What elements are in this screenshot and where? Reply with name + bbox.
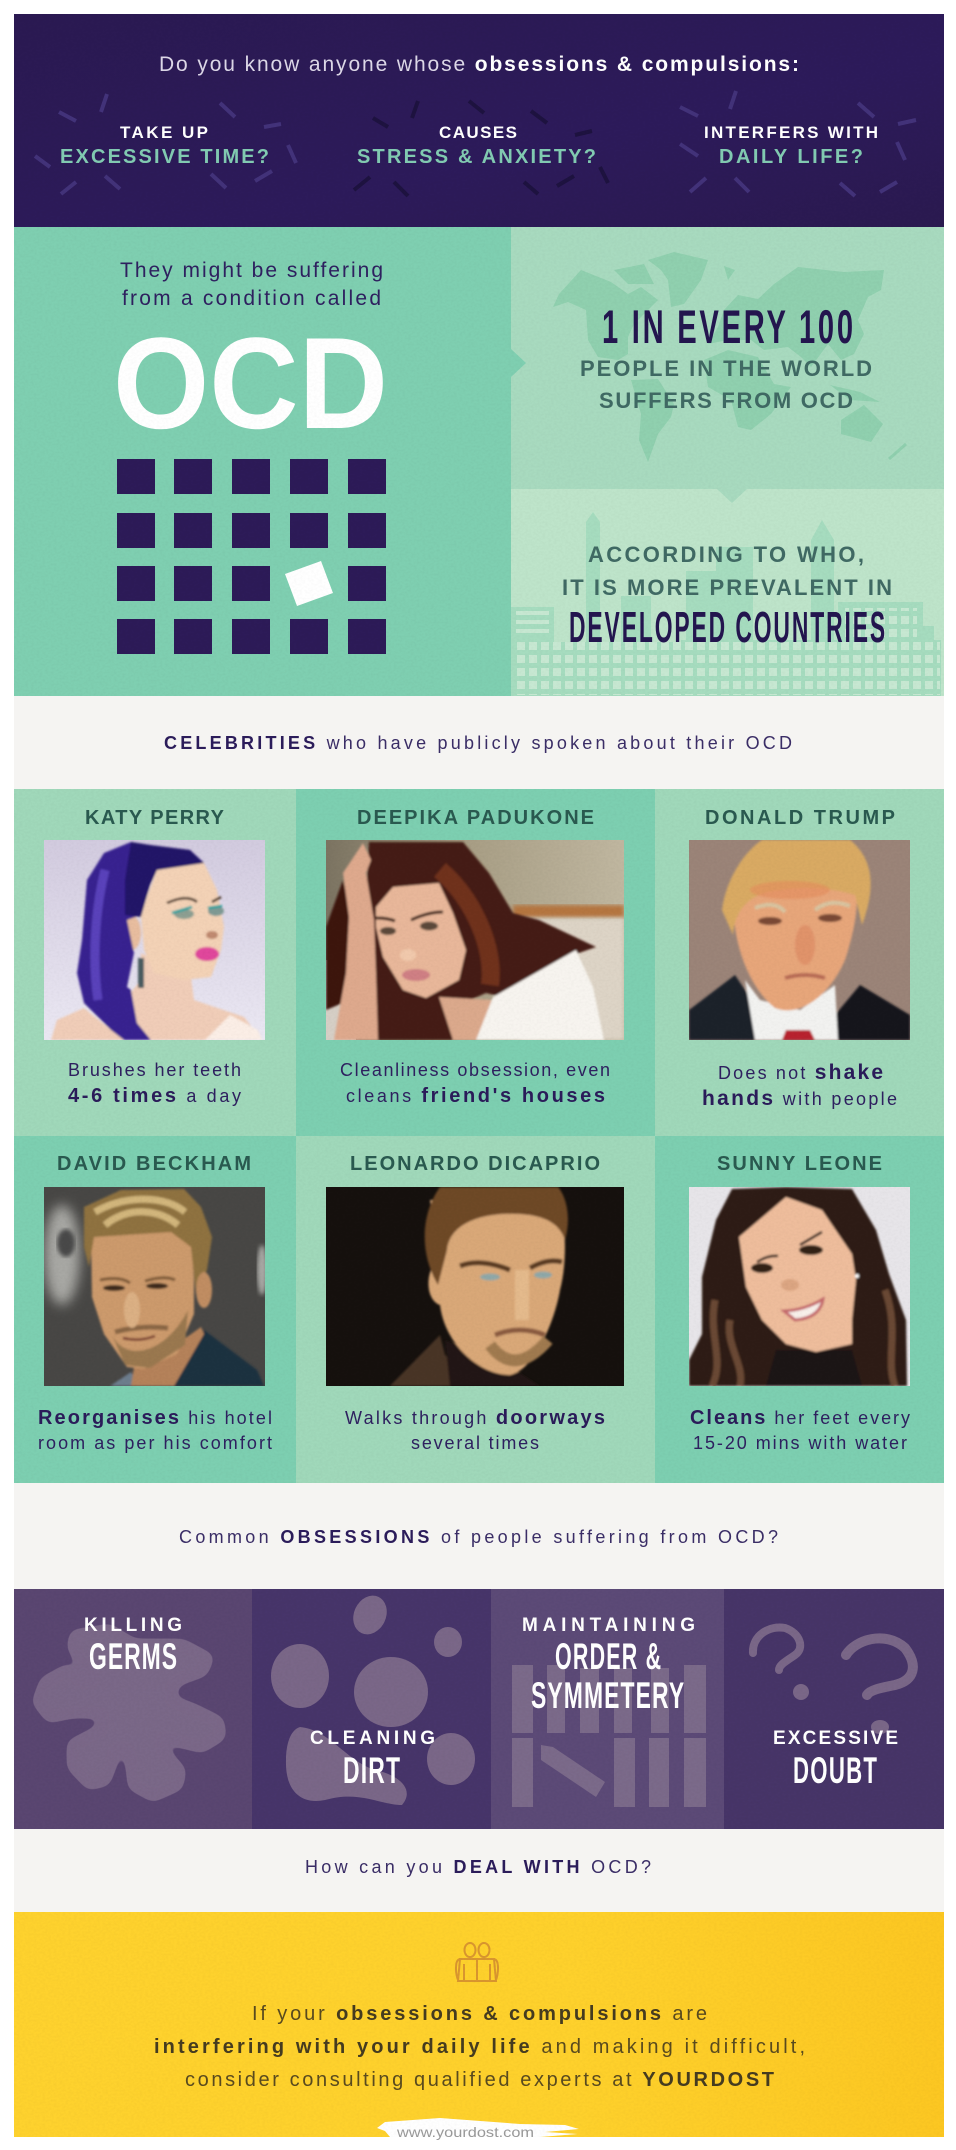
caption: Leonardo DiCaprio: Walks through doorways (345, 1407, 605, 1429)
caption: Katy Perry (68, 1060, 241, 1107)
stat: 1 in every 100: 1 IN EVERY 100 (602, 302, 853, 354)
panel: common obsessions (14, 1589, 944, 1829)
caption: Deepika Padukone (340, 1060, 610, 1107)
card: Deepika Padukone: DEEPIKA PADUKONE (357, 807, 594, 829)
panel: developed countries (511, 489, 944, 696)
question: stress and anxiety: STRESS & ANXIETY? (357, 146, 596, 168)
band: celebrities heading: CELEBRITIES who have publicly spoken about their OCD (164, 733, 792, 753)
obsession: killing germs: GERMS (89, 1635, 177, 1677)
obsession: cleaning dirt: CLEANING (310, 1728, 435, 1749)
card: Katy Perry: KATY PERRY (85, 807, 225, 829)
band: deal with OCD heading (14, 1829, 944, 1912)
question: daily life: INTERFERS WITH (704, 123, 878, 142)
caption: Donald Trump: hands with people (702, 1087, 897, 1110)
obsession: killing germs (35, 1615, 223, 1799)
card: Donald Trump (689, 807, 910, 1110)
text: according to WHO: ACCORDING TO WHO, (588, 542, 864, 567)
title: OCD: OCD (113, 310, 388, 456)
icon: dirt blobs (271, 1590, 475, 1805)
obsession: cleaning dirt: DIRT (343, 1749, 400, 1791)
band: obsessions heading (14, 1483, 944, 1589)
call to action text: interfering with your daily life and making it difficult, (154, 2036, 805, 2058)
card: Deepika Padukone (326, 807, 624, 1107)
band: deal with OCD heading: How can you DEAL WITH OCD? (305, 1857, 651, 1877)
caption: Katy Perry: Brushes her teeth (68, 1060, 241, 1080)
photo: Sunny Leone (689, 1187, 910, 1386)
question: stress and anxiety: CAUSES (439, 123, 517, 142)
panel: celebrity grid (14, 789, 944, 1483)
stat caption: SUFFERS FROM OCD (599, 388, 853, 413)
card: Leonardo DiCaprio: LEONARDO DICAPRIO (350, 1153, 600, 1175)
text: developed countries: DEVELOPED COUNTRIES (569, 603, 885, 652)
caption: Leonardo DiCaprio (345, 1407, 605, 1453)
obsession: excessive doubt: EXCESSIVE (773, 1728, 898, 1749)
text: according to WHO: IT IS MORE PREVALENT IN (562, 575, 892, 600)
obsession: maintaining order and symmetry: ORDER & (555, 1637, 661, 1678)
heading: do you know: Do you know anyone whose obsessions & compulsions: (159, 53, 799, 76)
photo: Deepika Padukone (326, 840, 624, 1040)
arrow: right pointer (511, 349, 526, 377)
question: excessive time: EXCESSIVE TIME? (60, 146, 269, 168)
obsession: excessive doubt: DOUBT (793, 1750, 877, 1791)
website badge: www.yourdost.com (396, 2124, 534, 2140)
obsession: excessive doubt (753, 1627, 913, 1791)
panel: OCD condition (14, 227, 511, 696)
obsession: maintaining order and symmetry (512, 1615, 706, 1807)
caption: David Beckham: Reorganises his hotel (38, 1407, 272, 1429)
caption: Sunny Leone: 15-20 mins with water (693, 1433, 907, 1453)
panel: call to action (14, 1912, 944, 2140)
question: excessive time (60, 123, 269, 168)
city skyline (511, 512, 941, 696)
caption: Deepika Padukone: Cleanliness obsession, even (340, 1060, 610, 1080)
question: stress and anxiety (357, 123, 596, 168)
question: daily life: DAILY LIFE? (719, 146, 863, 168)
panel: 1 in every 100 (511, 227, 944, 489)
square grid with one misaligned square (117, 459, 386, 654)
obsession: killing germs: KILLING (84, 1615, 182, 1636)
photo: Leonardo DiCaprio (326, 1187, 624, 1386)
card: Donald Trump: DONALD TRUMP (705, 807, 895, 829)
icon: germ splat (35, 1627, 223, 1799)
intro text: They might be suffering (120, 259, 383, 282)
intro text (120, 259, 383, 310)
obsession: maintaining order and symmetry: SYMMETERY (531, 1674, 684, 1716)
icon: tally marks (512, 1665, 706, 1807)
caption: Donald Trump: Does not shake (718, 1061, 883, 1084)
question: excessive time: TAKE UP (120, 123, 208, 142)
call to action text: consider consulting qualified experts at YOURDOST (185, 2069, 774, 2091)
obsession: maintaining order and symmetry: MAINTAINING (522, 1615, 695, 1636)
photo: Katy Perry (44, 840, 265, 1040)
caption: Katy Perry: 4-6 times a day (68, 1085, 241, 1107)
card: David Beckham (38, 1153, 272, 1453)
caption: David Beckham: room as per his comfort (38, 1433, 272, 1453)
website badge (377, 2118, 579, 2140)
intro text: from a condition called (122, 287, 381, 310)
caption: Sunny Leone (690, 1407, 910, 1453)
panel: intro questions (14, 14, 944, 227)
question: daily life (704, 123, 878, 168)
world map (553, 252, 906, 462)
photo: Donald Trump (689, 840, 910, 1040)
icon: question marks (753, 1627, 913, 1695)
card: Leonardo DiCaprio (326, 1153, 624, 1453)
caption: Sunny Leone: Cleans her feet every (690, 1407, 910, 1429)
caption: Deepika Padukone: cleans friend's houses (346, 1085, 605, 1107)
decorative dashes (35, 91, 916, 196)
call to action text (154, 2003, 805, 2091)
card: Sunny Leone: SUNNY LEONE (717, 1153, 882, 1175)
stat caption: PEOPLE IN THE WORLD (580, 356, 872, 381)
band: celebrities heading (14, 696, 944, 789)
call to action text: If your obsessions & compulsions are (252, 2003, 707, 2025)
caption: David Beckham (38, 1407, 272, 1453)
band: obsessions heading: Common OBSESSIONS of people suffering from OCD? (179, 1527, 778, 1547)
caption: Leonardo DiCaprio: several times (411, 1433, 539, 1453)
card: Katy Perry (44, 807, 265, 1107)
text: according to WHO (562, 542, 892, 600)
photo: David Beckham (44, 1187, 267, 1386)
arrow: down pointer (717, 489, 747, 503)
stat caption (580, 356, 872, 413)
caption: Donald Trump (702, 1061, 897, 1110)
icon: two people (456, 1943, 498, 1981)
card: Sunny Leone (689, 1153, 910, 1453)
obsession: cleaning dirt (271, 1590, 475, 1805)
card: David Beckham: DAVID BECKHAM (57, 1153, 251, 1175)
